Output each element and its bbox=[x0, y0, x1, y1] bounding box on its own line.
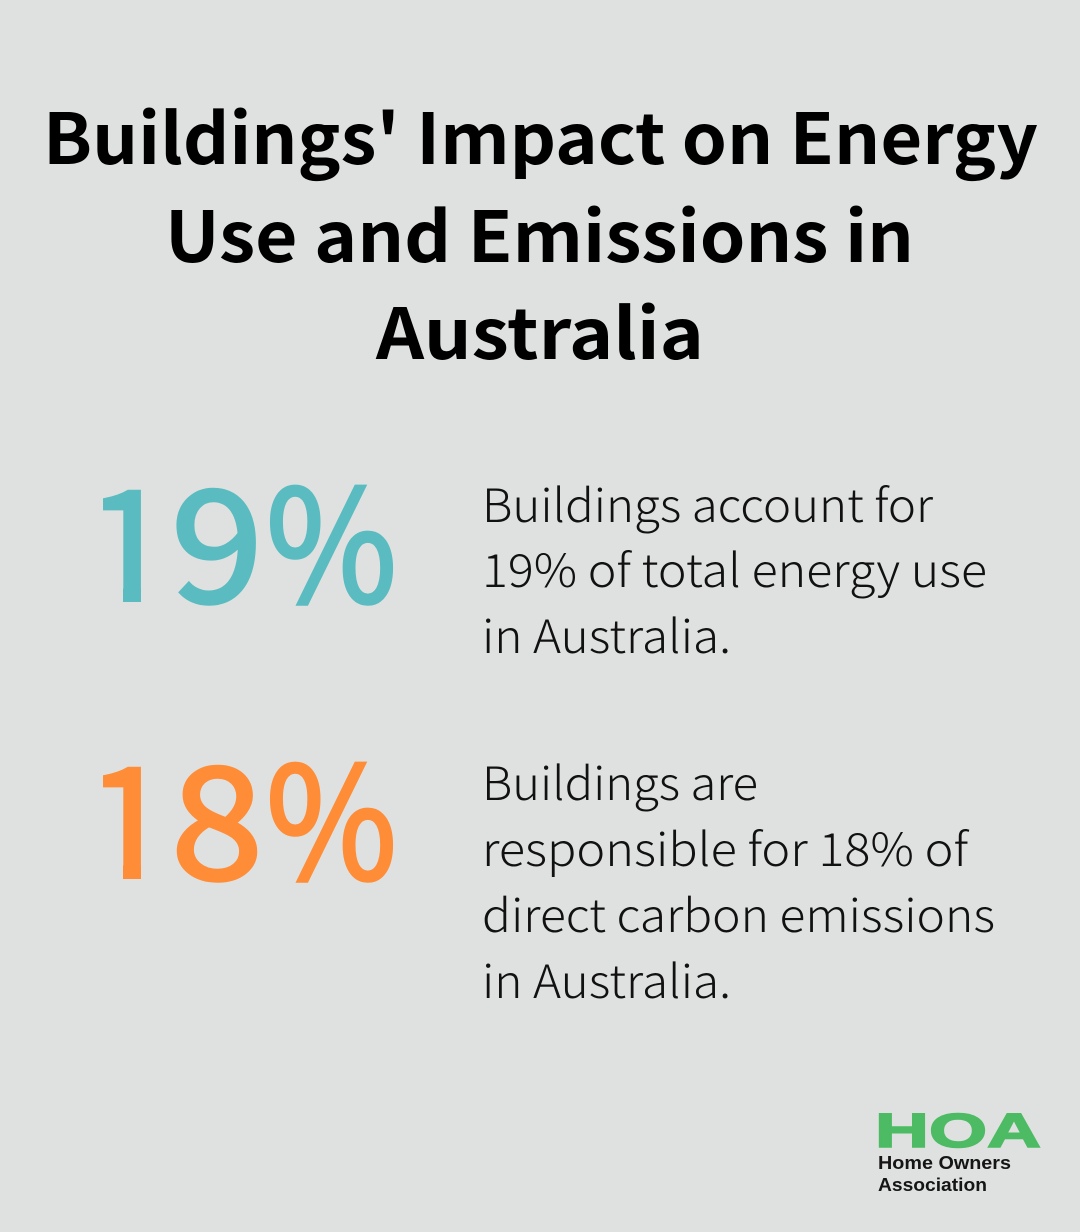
stat: 19 percent: % bbox=[266, 422, 397, 647]
title: Australia bbox=[375, 279, 704, 380]
title: Buildings' Impact on Energy bbox=[43, 84, 1038, 185]
text: carbon emissions description: in Australia. bbox=[482, 946, 731, 1012]
stat: 19 percent: 1 bbox=[86, 422, 172, 647]
stat: 18 percent: 8 bbox=[171, 699, 263, 924]
title: Use and Emissions in bbox=[165, 182, 914, 283]
logo: HOA Home Owners Association bbox=[875, 1105, 1041, 1195]
stat: 19 percent bbox=[103, 484, 394, 606]
stat: 18 percent: % bbox=[266, 699, 397, 924]
text: energy use description: 19% of total energy use bbox=[482, 535, 987, 601]
stat: 18 percent: 1 bbox=[86, 699, 172, 924]
text: carbon emissions description: Buildings are bbox=[482, 748, 758, 814]
logo: HOA Home Owners Association: Association bbox=[878, 1175, 987, 1195]
stat: 18 percent bbox=[103, 762, 394, 883]
text: energy use description: Buildings account for bbox=[482, 470, 933, 536]
logo: HOA Home Owners Association: Home Owners bbox=[878, 1153, 1011, 1173]
text: carbon emissions description: responsible for 18% of bbox=[482, 814, 969, 880]
logo: HOA Home Owners Association: HOA bbox=[875, 1105, 1041, 1158]
text: energy use description bbox=[482, 470, 987, 667]
title bbox=[43, 84, 1038, 380]
text: energy use description: in Australia. bbox=[482, 601, 731, 667]
text: carbon emissions description: direct carbon emissions bbox=[482, 880, 995, 946]
stat: 19 percent: 9 bbox=[171, 422, 263, 647]
text: carbon emissions description bbox=[482, 748, 995, 1012]
